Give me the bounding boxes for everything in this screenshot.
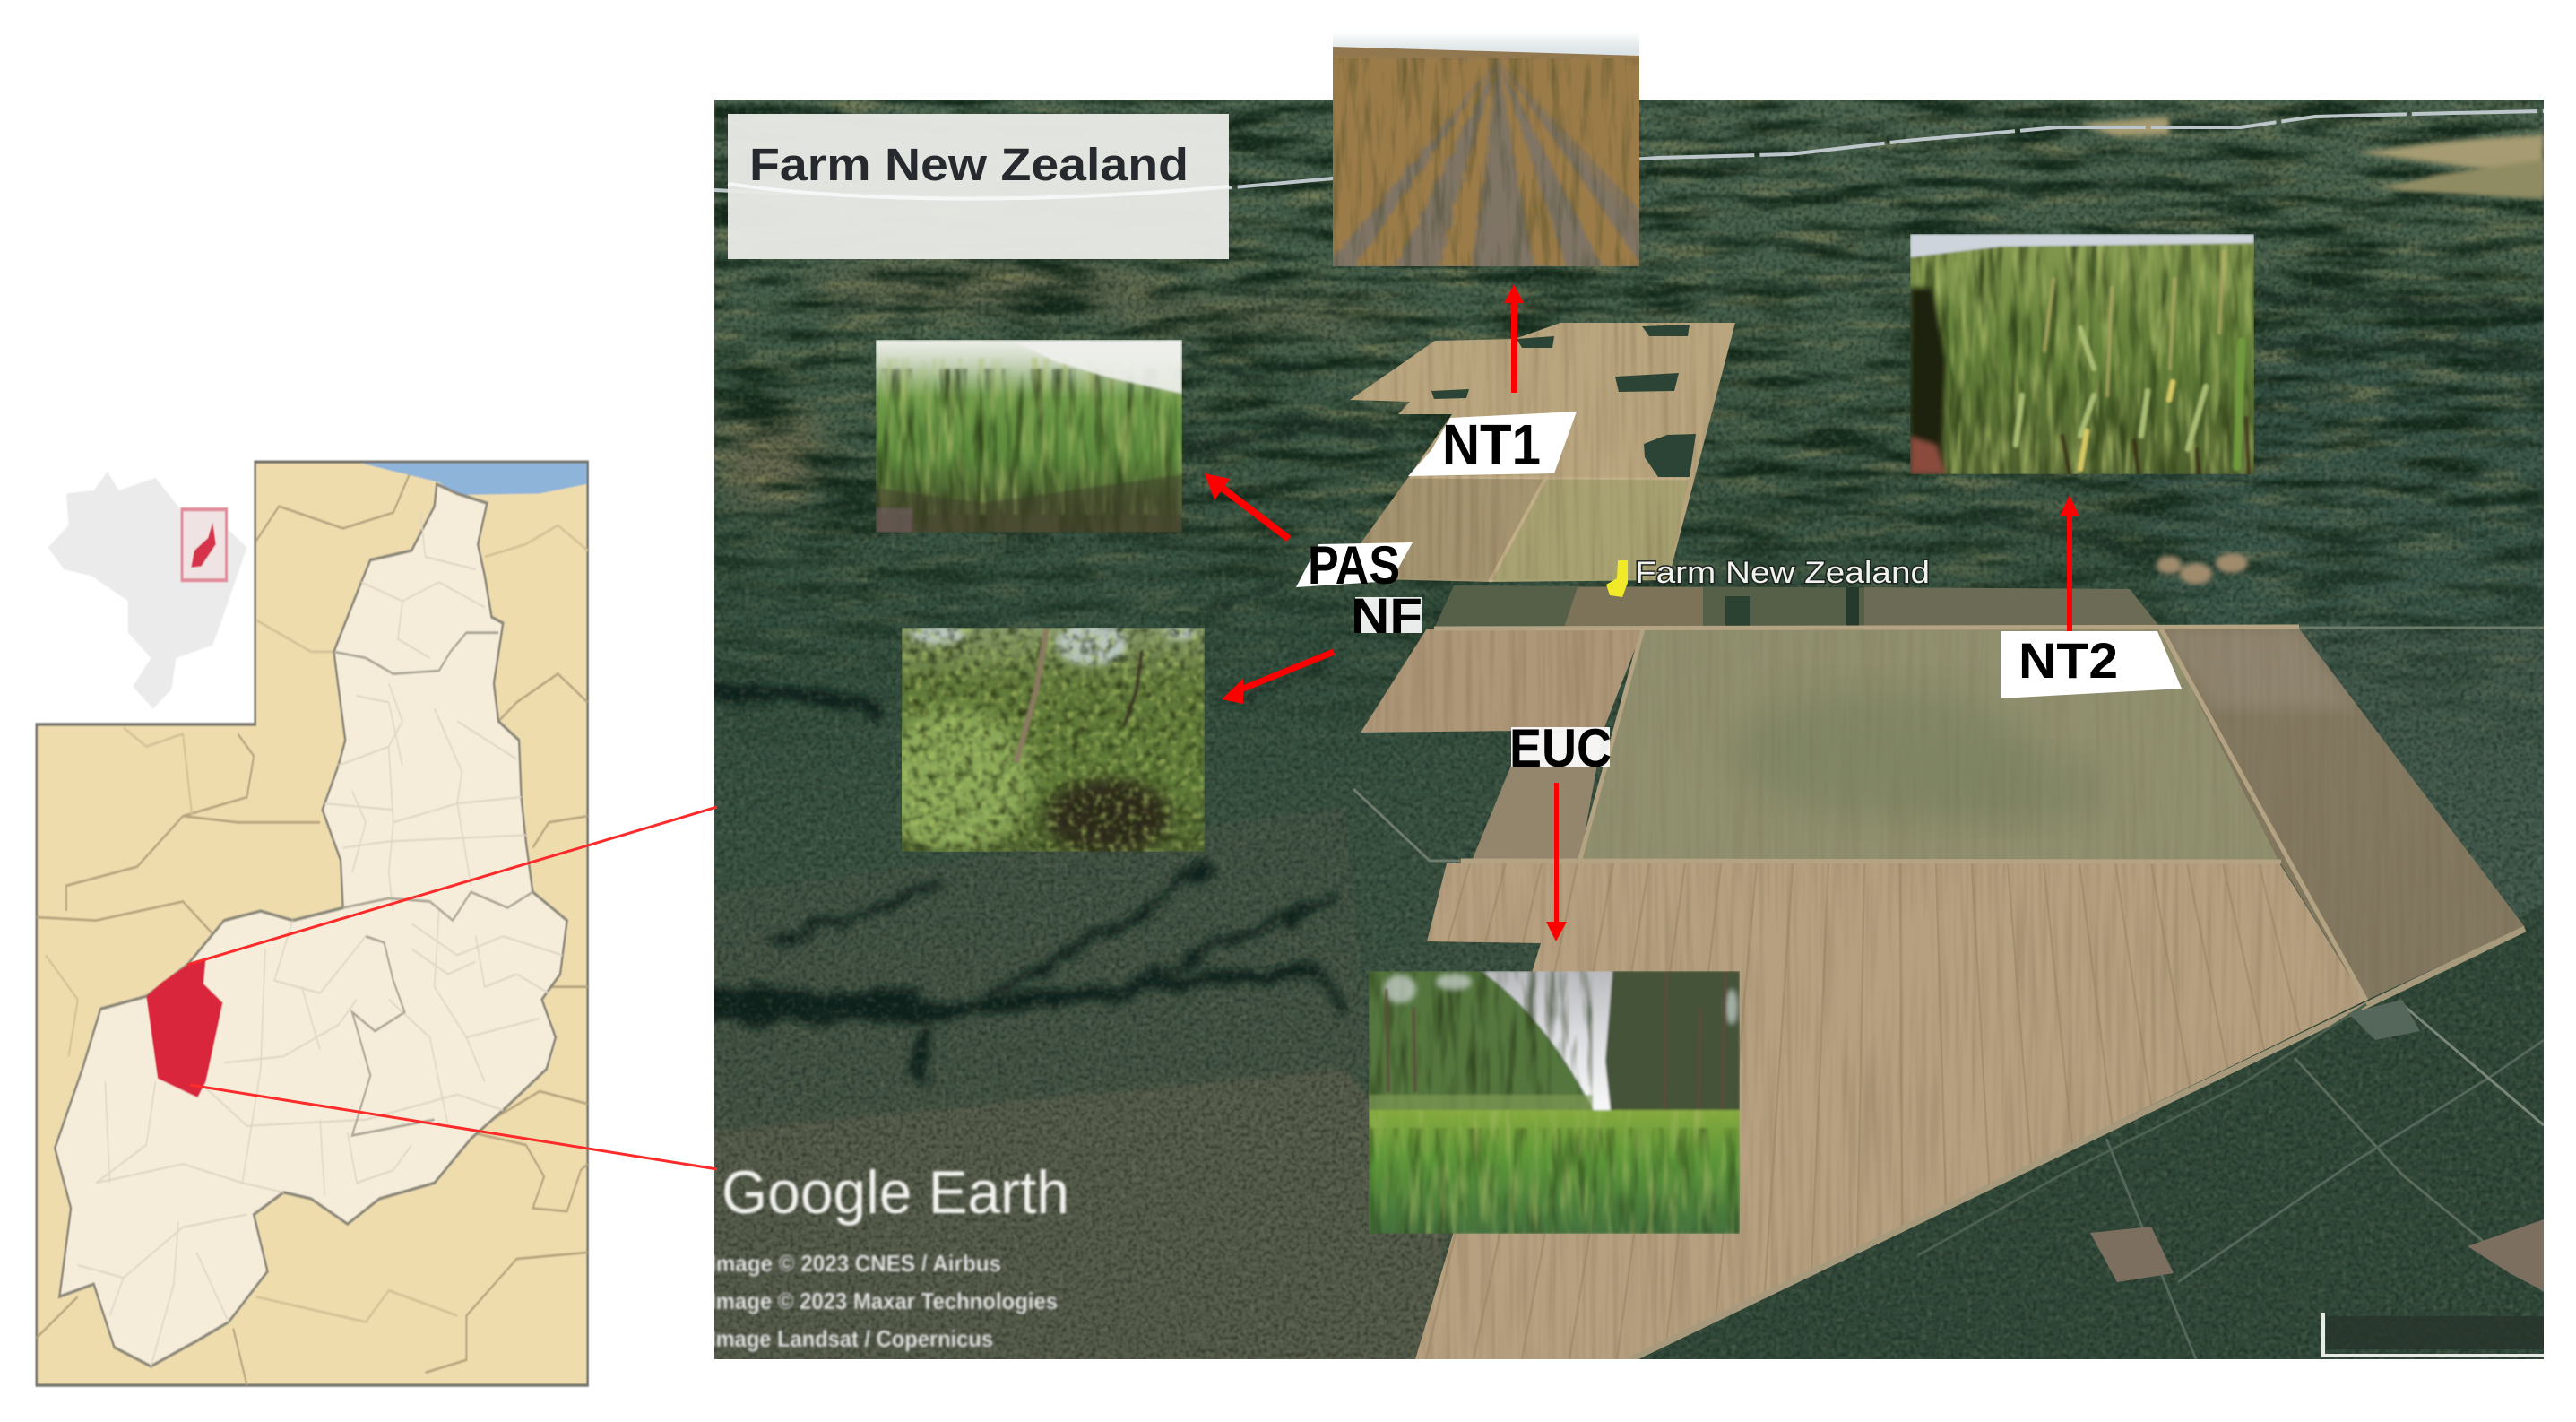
state border line on the horizon bbox=[714, 111, 2544, 197]
clearings in lower right plantation bbox=[2090, 1000, 2544, 1291]
highlighted municipality bbox=[146, 958, 222, 1097]
field: large striped lower field bbox=[1331, 852, 2380, 1363]
field: right brown strip bbox=[2151, 619, 2537, 1013]
satellite light grain bbox=[714, 100, 2544, 1359]
place label: Farm New Zealand: Farm New Zealand bbox=[1635, 556, 1930, 590]
terrain: upper left olive patches bbox=[717, 267, 1398, 507]
field: upper left bare soil bbox=[1344, 619, 1658, 744]
imagery credits: Image Landsat / Copernicus bbox=[710, 1325, 993, 1352]
photo: NT2 maize crop bbox=[1910, 234, 2254, 474]
Brazil silhouette bbox=[48, 472, 247, 708]
leader lines from map to satellite bbox=[187, 807, 717, 1169]
Google Earth logo: Google Earth bbox=[722, 1158, 1069, 1227]
field: small strip beside EUC bbox=[1472, 730, 1604, 861]
imagery credits: Image © 2023 CNES / Airbus bbox=[710, 1250, 1001, 1277]
icon: yellow location pin bbox=[1606, 560, 1628, 597]
arrow: PAS bbox=[1205, 473, 1289, 539]
imagery credits bbox=[710, 1250, 1058, 1352]
label: EUC: EUC bbox=[1509, 718, 1612, 778]
farm headquarters strip bbox=[1434, 585, 2161, 629]
satellite base terrain bbox=[714, 100, 2544, 1359]
terrain: lower left scrub bbox=[699, 807, 1452, 1372]
field: no-till 1 area bbox=[1327, 314, 1748, 592]
label: PAS: PAS bbox=[1308, 535, 1400, 595]
neighbouring state borders bbox=[37, 474, 588, 1385]
title box bbox=[728, 114, 1229, 259]
label: NT1 bbox=[1408, 412, 1577, 477]
clearings near NT2 bbox=[2157, 553, 2248, 585]
arrow: NF bbox=[1222, 652, 1334, 704]
municipal boundaries bbox=[78, 513, 563, 1366]
photo: EUC eucalyptus plantation bbox=[1369, 971, 1740, 1234]
label: NT2 bbox=[2001, 631, 2182, 698]
regional boundaries bbox=[333, 633, 532, 1135]
field: central pasture bbox=[1569, 619, 2286, 870]
Piauí silhouette bbox=[191, 522, 216, 568]
ocean bbox=[361, 464, 587, 495]
label: NT2: NT2 bbox=[2018, 632, 2118, 689]
terrain: right forest bbox=[2299, 619, 2544, 927]
terrain: creek network bbox=[699, 296, 2544, 1080]
title box: Farm New Zealand bbox=[749, 139, 1189, 190]
imagery credits: Image © 2023 Maxar Technologies bbox=[710, 1288, 1058, 1314]
satellite image panel bbox=[699, 100, 2544, 1372]
photo: PAS pasture grass bbox=[876, 340, 1182, 533]
field gaps: forest patches bbox=[1431, 325, 1696, 477]
label: NF: NF bbox=[1351, 587, 1422, 644]
map background: neighbouring states bbox=[37, 462, 588, 1385]
scale bar bbox=[2323, 1313, 2544, 1356]
inset marker box bbox=[182, 509, 227, 580]
label: NT1: NT1 bbox=[1442, 412, 1541, 477]
state of Piauí bbox=[55, 484, 567, 1366]
field edge roads bbox=[1353, 627, 2544, 1359]
inset: Brazil locator bbox=[48, 472, 247, 708]
horizon clearings bbox=[2079, 117, 2544, 195]
photo: NT1 soybean stubble bbox=[1333, 36, 1639, 266]
terrain: lower right plantations bbox=[1631, 906, 2544, 1359]
photo: NF native forest bbox=[902, 628, 1205, 852]
satellite surface grain bbox=[714, 100, 2544, 1359]
arrow: NT1 bbox=[1504, 284, 1524, 393]
terrain: horizon bands bbox=[714, 100, 2544, 781]
arrow: EUC bbox=[1546, 783, 1567, 941]
arrow: NT2 bbox=[2060, 495, 2079, 631]
location map: Piauí state bbox=[37, 462, 588, 1385]
